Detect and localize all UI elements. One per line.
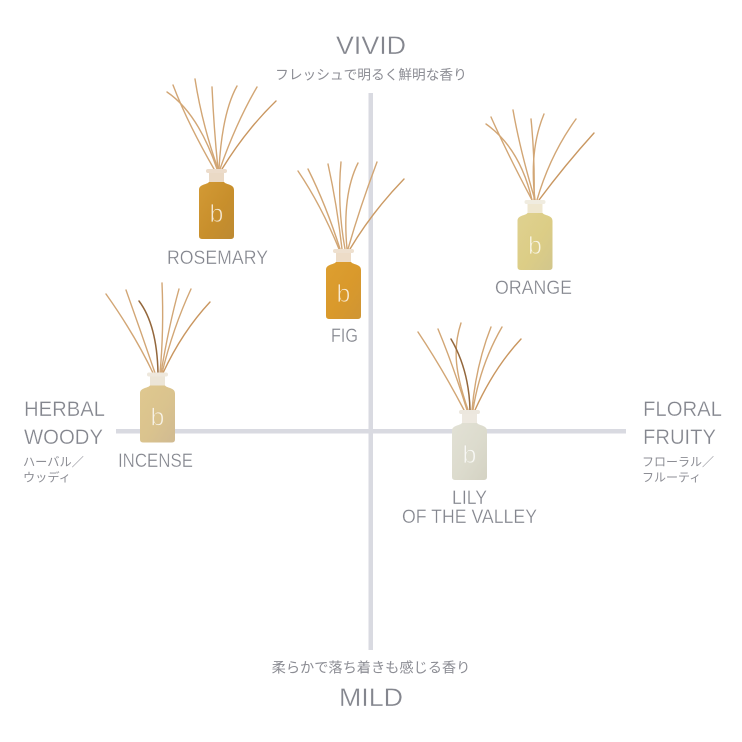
bottle: incense (140, 372, 175, 442)
label: orange: ORANGE (495, 277, 572, 299)
horizontal axis (116, 429, 626, 434)
reeds: rosemary (167, 79, 276, 169)
left axis label: herbal woody: ウッディ (23, 470, 71, 484)
reeds: orange (486, 110, 594, 200)
caption: vivid description: フレッシュで明るく鮮明な香り (275, 68, 467, 82)
caption: mild description: 柔らかで落ち着きも感じる香り (272, 660, 470, 676)
label: lily of the valley (402, 487, 537, 528)
product: fig diffuser (298, 162, 404, 347)
product: orange diffuser (486, 110, 594, 299)
label: rosemary: ROSEMARY (167, 247, 268, 269)
bottle: orange (518, 200, 552, 270)
left axis label: herbal woody: WOODY (24, 426, 103, 449)
bottle: rosemary: b (210, 200, 223, 228)
reeds: lily of the valley (418, 323, 521, 410)
product: lily of the valley diffuser (402, 323, 537, 528)
left axis label: herbal woody: HERBAL (24, 398, 105, 421)
product: rosemary diffuser (167, 79, 276, 269)
vertical axis (368, 93, 373, 650)
heading: VIVID: VIVID (336, 32, 406, 60)
left axis label: herbal woody: ハーバル／ (23, 455, 84, 469)
right axis label: floral fruity: フローラル／ (642, 455, 714, 469)
right axis label: floral fruity: フルーティ (642, 470, 701, 484)
right axis label: floral fruity (642, 398, 722, 484)
label: incense: INCENSE (118, 450, 193, 472)
reeds: fig (298, 162, 404, 249)
bottle: lily of the valley (452, 410, 487, 480)
bottle: fig (326, 249, 361, 319)
right axis label: floral fruity: FLORAL (643, 398, 722, 421)
bottle: rosemary (199, 169, 234, 239)
right axis label: floral fruity: FRUITY (643, 426, 716, 449)
left axis label: herbal woody (23, 398, 105, 484)
bottle: fig: b (337, 280, 350, 308)
bottle: incense: b (151, 404, 164, 432)
label: fig: FIG (331, 325, 358, 347)
label: lily of the valley: LILY (452, 487, 487, 509)
label: lily of the valley: OF THE VALLEY (402, 506, 537, 528)
bottle: lily of the valley: b (463, 441, 476, 469)
bottle: orange: b (528, 232, 542, 260)
product: incense diffuser (106, 283, 210, 472)
reeds: incense (106, 283, 210, 373)
heading: MILD: MILD (339, 684, 403, 712)
